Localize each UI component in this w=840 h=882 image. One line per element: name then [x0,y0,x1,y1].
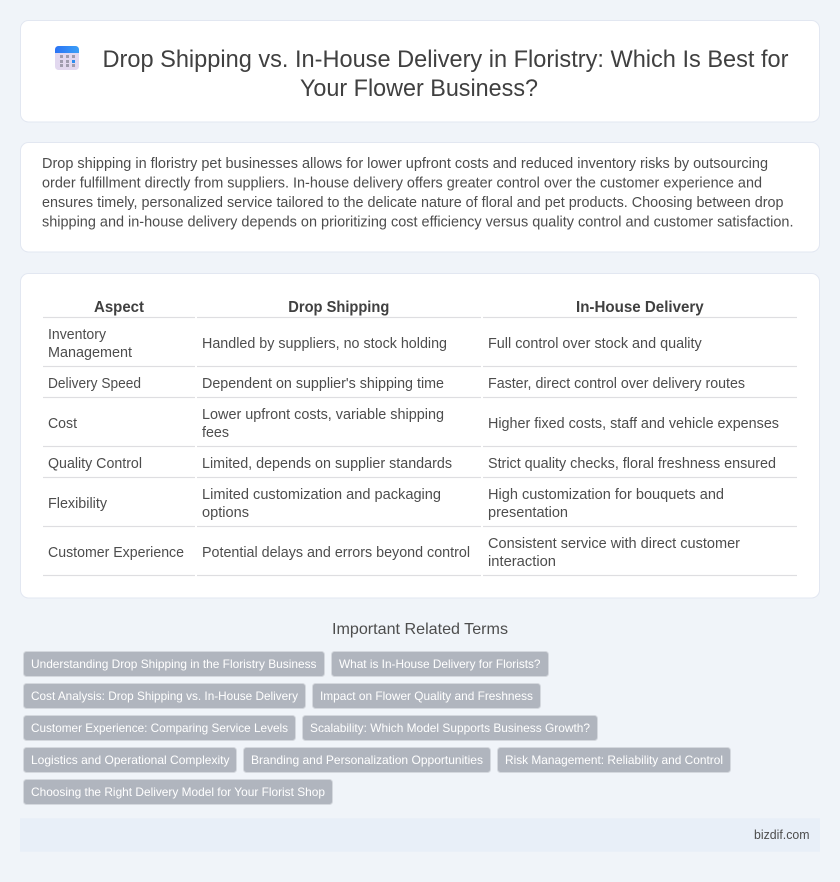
text block: intro [42,156,793,230]
row: cost: Higher fixed costs, staff and vehicle expenses [488,416,779,432]
title: Drop Shipping vs. In-House Delivery in Floristry: Which Is Best for [102,46,788,73]
row: inventory management: Full control over stock and quality [488,336,703,352]
tag: Risk Management: Reliability and Control [505,753,723,767]
table header: Drop Shipping [288,299,389,316]
footer credit: bizdif.com [754,827,810,842]
tag [24,716,296,740]
tag [24,748,236,772]
table header: Aspect [94,299,145,316]
text block: intro: ensures timely, personalized service tailored to the delicate nature of floral and pet products. Choosing between drop [42,195,784,211]
row: delivery speed: Dependent on supplier's shipping time [202,376,444,392]
tag: Understanding Drop Shipping in the Floristry Business [31,657,316,671]
tag: Logistics and Operational Complexity [31,753,229,767]
related terms tags [24,652,730,804]
tag [302,716,598,740]
text block: intro: Drop shipping in floristry pet businesses allows for lower upfront costs and reduced inventory risks by outsourcing [42,156,768,172]
row: customer experience: Customer Experience [48,545,184,561]
row: customer experience: Consistent service with direct customer [488,536,740,552]
title [102,46,788,102]
heading: related terms: Important Related Terms [332,621,508,638]
row: inventory management: Management [48,345,132,361]
row: cost: Lower upfront costs, variable shipping [202,407,444,423]
row: cost [48,407,779,441]
row: flexibility: presentation [488,505,568,521]
row: delivery speed: Faster, direct control over delivery routes [488,376,745,392]
tag [332,652,548,676]
text block: intro: shipping and in-house delivery depends on prioritizing cost efficiency versus quality control and customer satisfaction. [42,214,793,230]
title: Your Flower Business? [300,75,538,102]
row: customer experience: Potential delays and errors beyond control [202,545,470,561]
row: quality control [48,456,776,472]
tag [498,748,730,772]
text block: intro: order fulfillment directly from suppliers. In-house delivery offers greater control over the customer experience and [42,176,762,192]
row: quality control: Strict quality checks, floral freshness ensured [488,456,776,472]
row: flexibility: Flexibility [48,496,108,512]
tag [312,684,540,708]
row: inventory management: Handled by suppliers, no stock holding [202,336,447,352]
row: flexibility: Limited customization and packaging [202,487,441,503]
tag [24,652,324,676]
row: inventory management [48,327,703,361]
table header [94,299,704,316]
panel: intro paragraph [20,142,820,252]
row: quality control: Limited, depends on supplier standards [202,456,452,472]
tag [244,748,490,772]
tag: What is In-House Delivery for Florists? [339,657,541,671]
footer bar [20,818,820,852]
tag: Cost Analysis: Drop Shipping vs. In-House Delivery [31,689,298,703]
table header: In-House Delivery [576,299,704,316]
row: inventory management: Inventory [48,327,107,343]
tag [24,684,306,708]
tag: Scalability: Which Model Supports Business Growth? [310,721,590,735]
tag: Choosing the Right Delivery Model for Your Florist Shop [31,785,325,799]
row: delivery speed [48,376,745,392]
tag [24,780,332,804]
row: flexibility: options [202,505,249,521]
tag: Impact on Flower Quality and Freshness [320,689,533,703]
row: quality control: Quality Control [48,456,142,472]
tag: Customer Experience: Comparing Service Levels [31,721,288,735]
row: flexibility: High customization for bouquets and [488,487,724,503]
row: delivery speed: Delivery Speed [48,376,141,392]
row: cost: Cost [48,416,77,432]
row: cost: fees [202,425,229,441]
tag: Branding and Personalization Opportunities [251,753,483,767]
panel: comparison table [20,274,820,598]
row: flexibility [48,487,724,521]
icon: calendar [55,46,79,70]
row: customer experience [48,536,740,570]
panel: title card [20,20,820,122]
row: customer experience: interaction [488,554,556,570]
